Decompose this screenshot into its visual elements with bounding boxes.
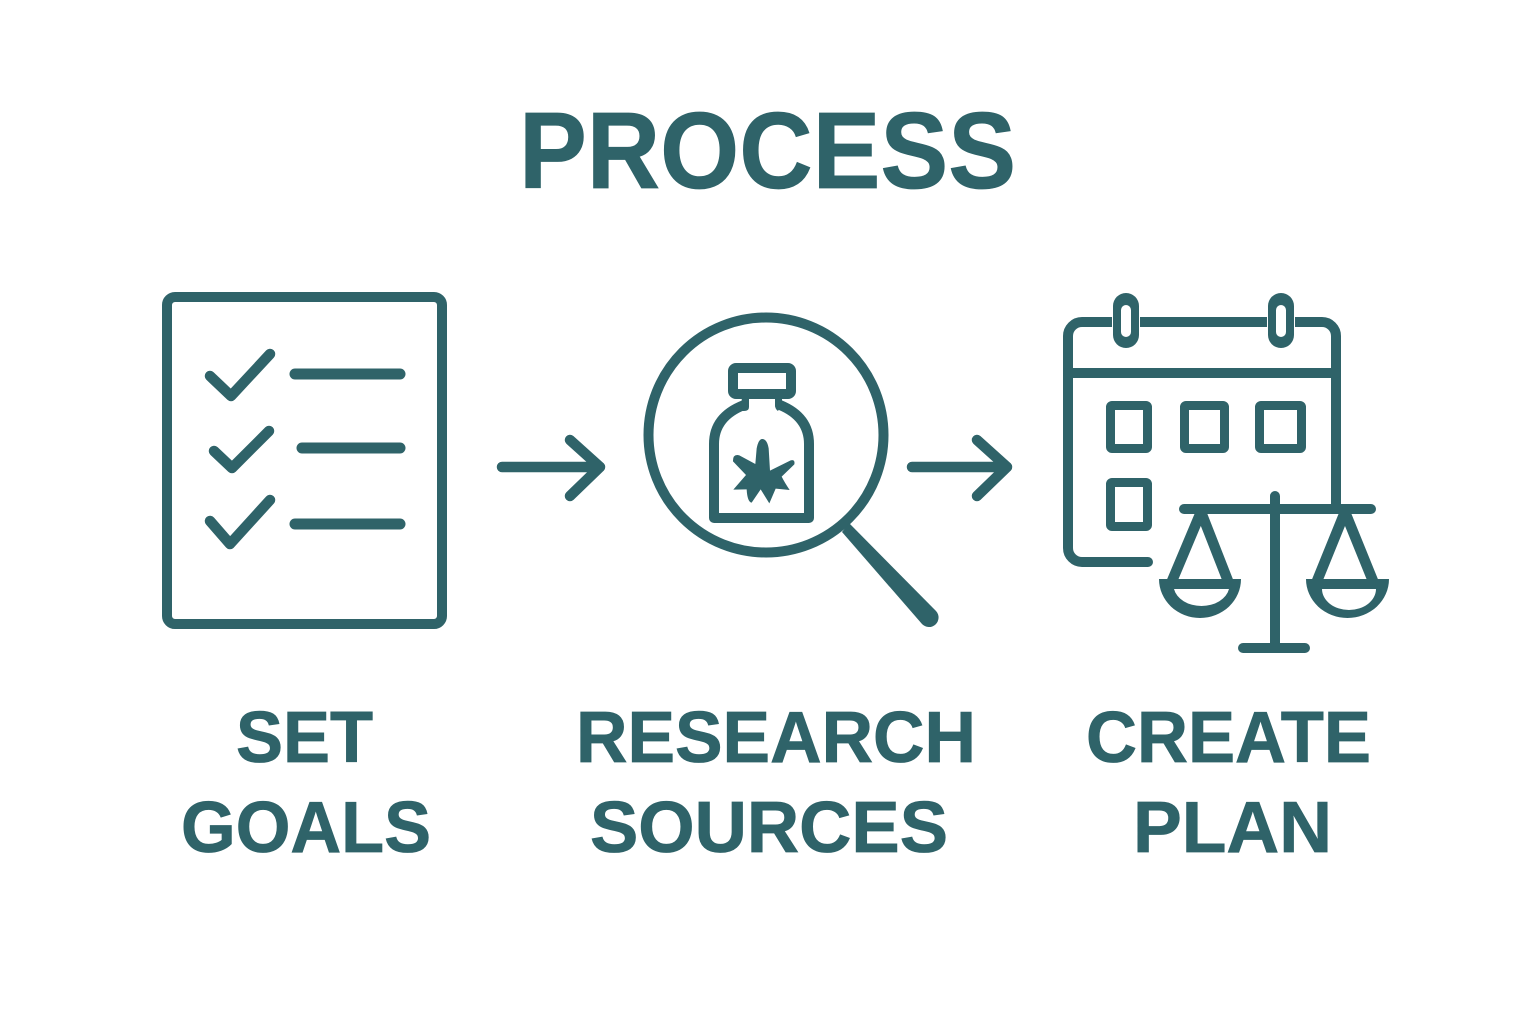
label: set goals: GOALS [181,788,431,868]
label: research sources: RESEARCH [576,698,976,778]
label: set goals [181,698,431,868]
icon: checklist [167,297,442,624]
icon: calendar [1068,292,1336,562]
label: set goals: SET [236,698,373,778]
checklist item 2 [214,431,400,468]
checklist item 1 [210,354,400,396]
magnifier lens [648,318,884,552]
magnifier handle [842,523,939,627]
label: create plan: CREATE [1086,698,1371,778]
bottle [714,368,809,518]
arrow: research to plan [912,440,1007,496]
calendar rings [1112,292,1295,349]
label: research sources: SOURCES [590,788,948,868]
calendar day squares [1110,406,1302,526]
label: create plan [1086,698,1371,868]
title: PROCESS [519,90,1016,212]
arrow: goals to research [502,440,600,496]
checklist item 3 [210,500,400,544]
label: create plan: PLAN [1133,788,1332,868]
icon: balance scales [1159,496,1389,648]
label: research sources [576,698,976,868]
leaf on bottle [733,439,795,503]
left pan [1159,512,1241,618]
right pan [1306,512,1389,618]
icon: magnifying glass with bottle [648,318,939,627]
